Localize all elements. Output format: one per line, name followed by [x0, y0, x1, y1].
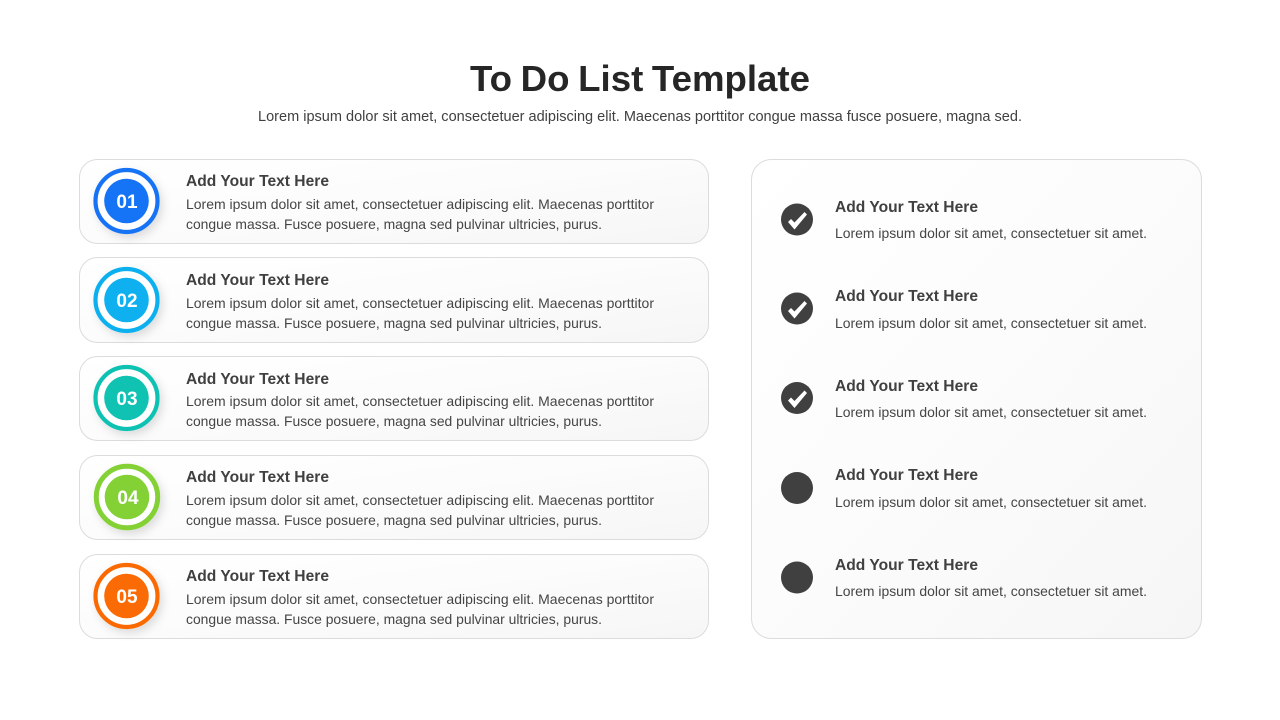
checklist heading: Add Your Text Here [835, 199, 978, 216]
checklist item 5 [781, 557, 1147, 599]
heading 05: Add Your Text Here [186, 568, 329, 585]
title: To Do List Template [470, 58, 810, 99]
body text 04: Lorem ipsum dolor sit amet, consectetuer adipiscing elit. Maecenas porttitor [186, 492, 654, 508]
checklist text: Lorem ipsum dolor sit amet, consectetuer sit amet. [835, 494, 1147, 510]
body text 03 [186, 393, 654, 429]
panel: item 03 [80, 356, 708, 440]
body text 03: Lorem ipsum dolor sit amet, consectetuer adipiscing elit. Maecenas porttitor [186, 393, 654, 409]
body text 01: Lorem ipsum dolor sit amet, consectetuer adipiscing elit. Maecenas porttitor [186, 196, 654, 212]
checklist item 4 [781, 467, 1147, 510]
subtitle: Lorem ipsum dolor sit amet, consectetuer adipiscing elit. Maecenas porttitor congue massa fusce posuere, magna sed. [258, 109, 1022, 125]
icon: badge 01: 01 [116, 192, 138, 213]
body text 04: congue massa. Fusce posuere, magna sed pulvinar ultricies, purus. [186, 512, 602, 528]
checklist text: Lorem ipsum dolor sit amet, consectetuer sit amet. [835, 315, 1147, 331]
icon: badge 03: 03 [116, 389, 138, 410]
checklist heading: Add Your Text Here [835, 557, 978, 574]
body text 05: Lorem ipsum dolor sit amet, consectetuer adipiscing elit. Maecenas porttitor [186, 591, 654, 607]
heading 04: Add Your Text Here [186, 469, 329, 486]
icon: badge 02 [96, 269, 158, 331]
checklist heading: Add Your Text Here [835, 378, 978, 395]
body text 03: congue massa. Fusce posuere, magna sed pulvinar ultricies, purus. [186, 413, 602, 429]
icon: badge 04 [96, 466, 158, 528]
body text 05: congue massa. Fusce posuere, magna sed pulvinar ultricies, purus. [186, 611, 602, 627]
icon: empty circle [781, 472, 813, 504]
body text 02 [186, 295, 654, 331]
icon: badge 02: 02 [116, 291, 138, 312]
heading 01: Add Your Text Here [186, 173, 329, 190]
panel: item 04 [80, 456, 708, 540]
icon: empty circle [781, 562, 813, 594]
body text 02: congue massa. Fusce posuere, magna sed pulvinar ultricies, purus. [186, 315, 602, 331]
icon: checked circle [781, 292, 813, 324]
checklist item 3 [781, 378, 1147, 420]
body text 01: congue massa. Fusce posuere, magna sed pulvinar ultricies, purus. [186, 216, 602, 232]
body text 05 [186, 591, 654, 627]
body text 02: Lorem ipsum dolor sit amet, consectetuer adipiscing elit. Maecenas porttitor [186, 295, 654, 311]
icon: badge 04: 04 [117, 488, 139, 509]
icon: badge 01 [96, 170, 158, 232]
checklist heading: Add Your Text Here [835, 467, 978, 484]
body text 01 [186, 196, 654, 232]
checklist text: Lorem ipsum dolor sit amet, consectetuer sit amet. [835, 225, 1147, 241]
panel: item 01 [80, 160, 708, 244]
icon: badge 05: 05 [116, 587, 138, 608]
heading 03: Add Your Text Here [186, 371, 329, 388]
icon: checked circle [781, 204, 813, 236]
icon: checked circle [781, 382, 813, 414]
panel: item 02 [80, 258, 708, 342]
checklist text: Lorem ipsum dolor sit amet, consectetuer sit amet. [835, 404, 1147, 420]
checklist item 1 [781, 199, 1147, 241]
checklist item 2 [781, 288, 1147, 331]
checklist text: Lorem ipsum dolor sit amet, consectetuer sit amet. [835, 583, 1147, 599]
heading 02: Add Your Text Here [186, 272, 329, 289]
icon: badge 05 [96, 565, 158, 627]
panel: checklist [752, 160, 1202, 638]
body text 04 [186, 492, 654, 528]
icon: badge 03 [96, 367, 158, 429]
panel: item 05 [80, 554, 708, 638]
checklist heading: Add Your Text Here [835, 288, 978, 305]
